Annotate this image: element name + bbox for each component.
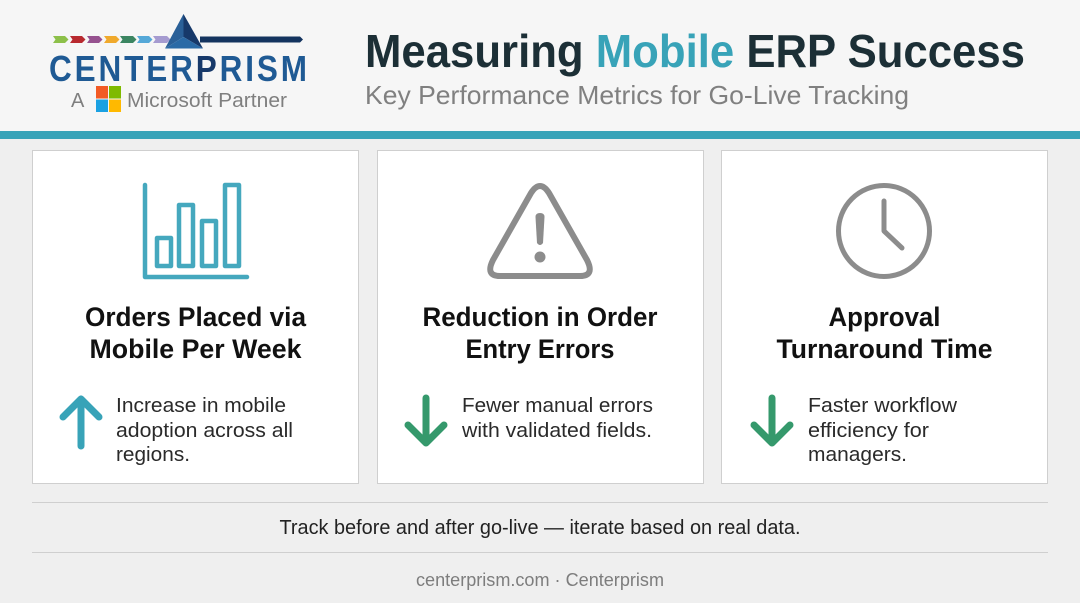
- description: efficiency for: [808, 419, 929, 442]
- icon: down arrow: [754, 398, 790, 443]
- heading: Entry Errors: [466, 334, 614, 364]
- icon: clock: [838, 186, 930, 276]
- heading: Orders Placed via: [85, 302, 307, 332]
- heading: Turnaround Time: [776, 334, 992, 364]
- panel: approval turnaround time: [722, 150, 1048, 484]
- footer: centerprism.com · Centerprism: [416, 570, 664, 590]
- description: [116, 394, 293, 466]
- title: Measuring Mobile ERP Success: [365, 25, 1025, 77]
- logo prism: [165, 14, 203, 48]
- heading: Reduction in Order: [422, 302, 658, 332]
- description: managers.: [808, 443, 907, 466]
- header band: [0, 0, 1080, 139]
- icon: down arrow: [408, 398, 444, 443]
- logo: Centerprism, a Microsoft Partner: [49, 14, 307, 112]
- logo chevron trail: [53, 36, 170, 43]
- logo letter A: A: [71, 90, 85, 112]
- logo wordmark: CENTERPRISM: [49, 49, 307, 90]
- icon: warning triangle: [490, 186, 590, 276]
- description: adoption across all: [116, 419, 293, 442]
- Microsoft logo: [96, 86, 121, 112]
- icon: bar chart: [145, 185, 247, 277]
- logo line: [200, 36, 303, 42]
- description: Faster workflow: [808, 394, 957, 417]
- description: with validated fields.: [461, 419, 652, 442]
- logo partner text: Microsoft Partner: [127, 90, 287, 112]
- description: [808, 394, 957, 466]
- description: [461, 394, 653, 442]
- subtitle: Key Performance Metrics for Go-Live Tracking: [365, 80, 909, 110]
- heading: [776, 302, 992, 364]
- panel: reduction in order entry errors: [378, 150, 704, 484]
- heading: [422, 302, 658, 364]
- heading: Mobile Per Week: [90, 334, 302, 364]
- description: Increase in mobile: [116, 394, 286, 417]
- description: Fewer manual errors: [462, 394, 653, 417]
- description: regions.: [116, 443, 190, 466]
- panel: orders placed via mobile: [32, 150, 358, 484]
- heading: [85, 302, 307, 364]
- heading: Approval: [828, 302, 940, 332]
- takeaway note: Track before and after go-live — iterate based on real data.: [280, 517, 800, 539]
- icon: up arrow: [63, 399, 99, 446]
